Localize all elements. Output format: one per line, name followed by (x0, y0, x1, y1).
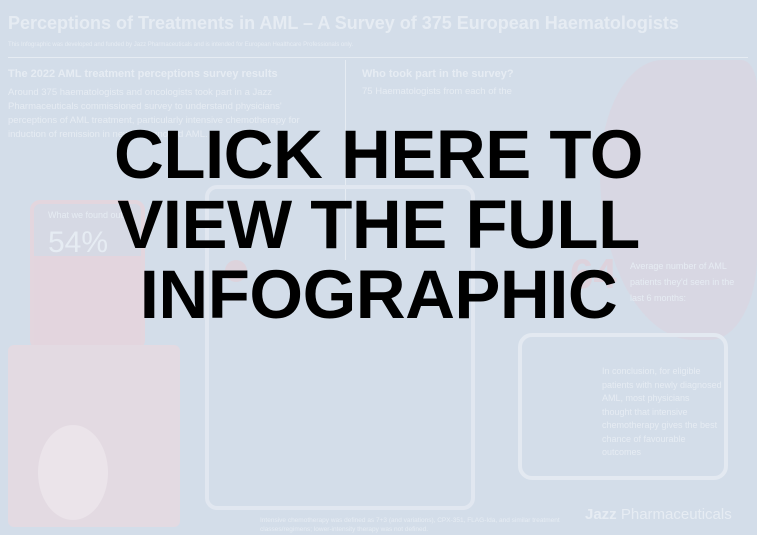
subtitle: This Infographic was developed and funded by Jazz Pharmaceuticals and is intended for European Healthcare Professionals only. (8, 42, 353, 48)
panel: what we found: 54% (48, 226, 108, 259)
panel: 64: 64 (570, 250, 617, 297)
panel: conclusion speech bubble: In conclusion, for eligible patients with newly diagnosed AML, most physicians thought that intensive chemotherapy gives the best chance of favourable outcomes (602, 366, 722, 457)
logo: Jazz Pharmaceuticals (585, 506, 732, 523)
call to action (114, 116, 643, 333)
section heading: results: The 2022 AML treatment perceptions survey results (8, 68, 278, 80)
call to action: VIEW THE FULL (117, 186, 640, 263)
panel: conclusion speech bubble (518, 333, 728, 480)
footer text: Intensive chemotherapy was defined as 7+3 (and variations), CPX-351, FLAG-Ida, and similar treatment classes/regimens; lower-intensity therapy was not defined. (260, 517, 560, 533)
map decoration (600, 60, 757, 340)
title: Perceptions of Treatments in AML – A Survey of 375 European Haematologists (8, 13, 679, 33)
panel: pink drop (8, 345, 180, 527)
intro text: Around 375 haematologists and oncologists took part in a Jazz Pharmaceuticals commissioned survey to understand physicians' perceptions of AML treatment, particularly intensive chemotherapy for induction of remission in newly diagnosed AML. (8, 87, 300, 140)
panel: what we found: What we found out (48, 210, 123, 220)
section heading: who: Who took part in the survey? (362, 68, 514, 80)
call to action: INFOGRAPHIC (140, 256, 617, 333)
call to action: CLICK HERE TO (114, 116, 643, 193)
panel: what we found (30, 200, 145, 350)
icon column (225, 260, 247, 282)
background infographic: 75 Haematologists from each of the (362, 86, 512, 97)
panel: haematologists indicated (205, 185, 475, 510)
background infographic: Average number of AML patients they'd seen in the last 6 months: (630, 261, 734, 303)
